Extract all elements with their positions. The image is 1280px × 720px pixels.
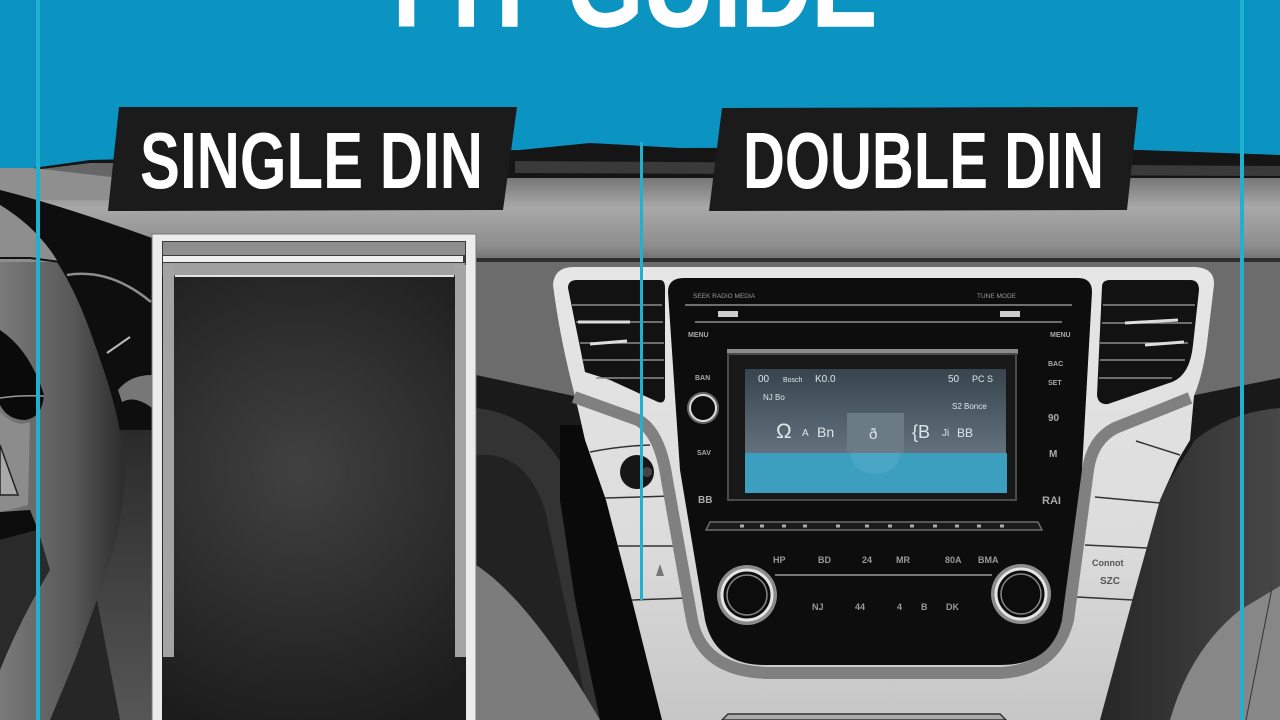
left lower seat [476, 408, 640, 720]
wheel top highlight [0, 205, 58, 262]
screen: Ji [942, 428, 949, 439]
dash top [0, 178, 1280, 262]
wheel hub opening [0, 330, 44, 420]
left black band [476, 375, 600, 480]
right button labels: M [1049, 449, 1057, 460]
right button labels: 90 [1048, 413, 1060, 424]
cd slot [685, 305, 1072, 322]
right air vent [1097, 280, 1199, 404]
small icon on silver panel [656, 564, 664, 576]
right button labels [1042, 332, 1071, 507]
screen: NJ Bo [763, 393, 785, 402]
right button labels: RAI [1042, 495, 1061, 507]
left air vent [568, 280, 665, 402]
left driver area [0, 190, 152, 720]
right button labels: BAC [1048, 361, 1063, 368]
screen: {B [912, 422, 930, 442]
size label [1092, 558, 1124, 587]
right button labels: SET [1048, 380, 1062, 387]
label: double din: DOUBLE DIN [743, 116, 1104, 205]
grey trim [574, 397, 1190, 673]
screen: BB [957, 426, 973, 440]
round button [620, 455, 654, 489]
right button labels: MENU [1050, 332, 1071, 339]
lower controls: BMA [978, 555, 999, 565]
lower controls: B [921, 602, 928, 612]
lower controls: MR [896, 555, 910, 565]
lower controls: BD [818, 555, 831, 565]
screen: A [802, 428, 809, 439]
lower controls: 80A [945, 555, 962, 565]
head unit panel: TUNE MODE [977, 293, 1017, 300]
label: single din [108, 107, 517, 211]
screen: S2 Bonce [952, 402, 987, 411]
top-left knob [687, 392, 719, 424]
lower controls: NJ [812, 602, 824, 612]
lower controls: 44 [855, 602, 865, 612]
dash lower edge [476, 258, 1280, 262]
screen: ð [869, 426, 877, 443]
single din unit [152, 234, 476, 720]
bottom-right knob [991, 564, 1051, 624]
left button labels: SAV [697, 450, 711, 457]
indicator strip [706, 522, 1042, 530]
screen [727, 349, 1018, 500]
label: single din: SINGLE DIN [140, 116, 483, 205]
screen: PC S [972, 374, 993, 384]
screen: Ω [776, 420, 792, 443]
seams on side panels [590, 441, 1180, 600]
left button labels [688, 332, 712, 506]
screen: Bosch [783, 377, 803, 384]
center console silver bezel [553, 267, 1214, 720]
windshield base strip [33, 143, 1280, 190]
label: double din [709, 107, 1138, 211]
right lower seat [1100, 408, 1280, 720]
size label: SZC [1100, 576, 1120, 587]
screen: Bn [817, 424, 834, 440]
left button labels: BAN [695, 375, 710, 382]
lower controls: DK [946, 602, 959, 612]
steering wheel [0, 205, 124, 720]
lower controls: 24 [862, 555, 872, 565]
screen: 50 [948, 374, 960, 385]
screen: K0.0 [815, 374, 836, 385]
lower tray [722, 714, 1006, 720]
right black band [1150, 378, 1280, 530]
left button labels: MENU [688, 332, 709, 339]
left button labels: BB [698, 495, 712, 506]
screen: 00 [758, 374, 770, 385]
top labels: SEEK RADIO MEDIA [693, 293, 756, 300]
background: blue sky [0, 0, 1280, 260]
stalk [118, 375, 152, 408]
lower controls: HP [773, 555, 786, 565]
gauge arc [67, 274, 151, 302]
lower ring shadow [50, 600, 120, 720]
gauge needle [107, 337, 130, 353]
instrument cave [0, 190, 152, 430]
hub lower [0, 412, 30, 512]
head unit panel [668, 278, 1092, 665]
lower controls: 4 [897, 602, 902, 612]
size label: Connot [1092, 558, 1124, 568]
bottom-left knob [717, 565, 777, 625]
lower controls [773, 555, 999, 612]
